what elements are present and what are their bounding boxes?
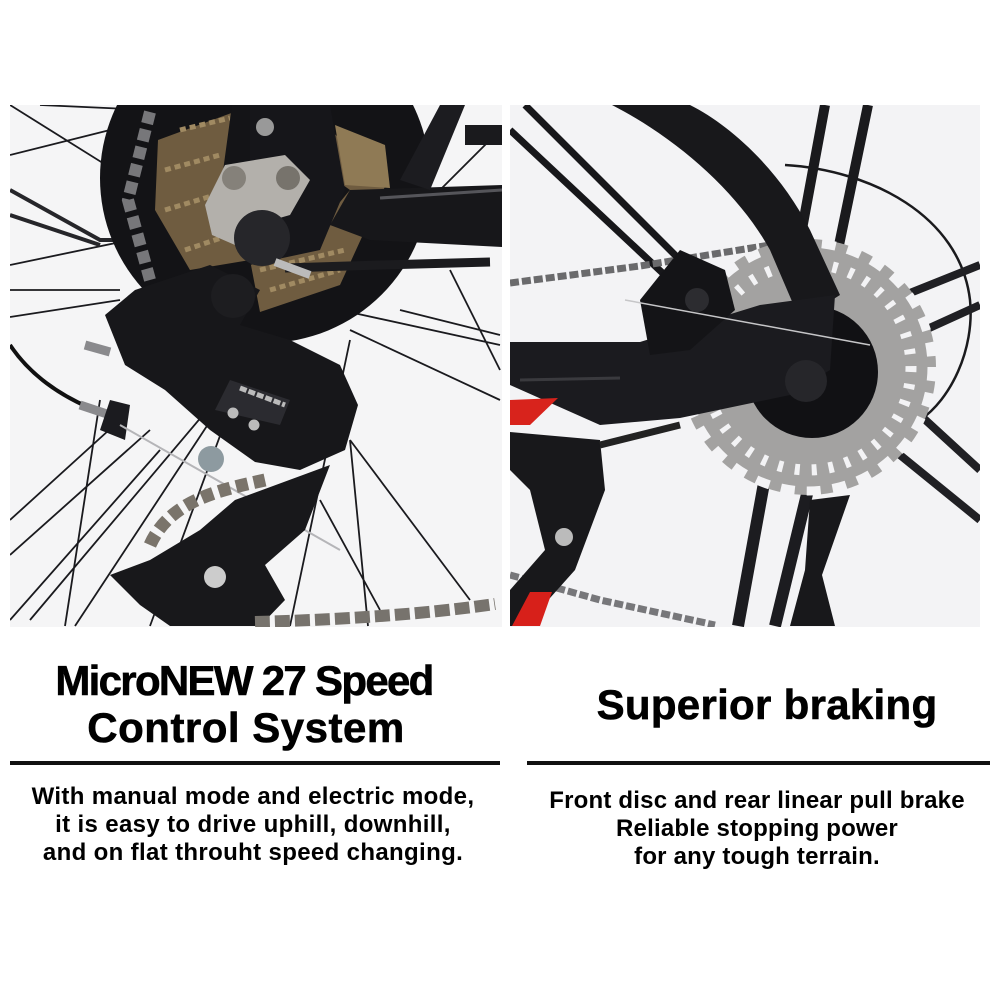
heading: speed control system xyxy=(55,657,433,751)
divider left xyxy=(10,761,500,765)
text: braking description: Reliable stopping power xyxy=(616,815,898,842)
frame xyxy=(330,185,502,247)
derailleur body xyxy=(105,265,358,470)
divider right xyxy=(527,761,990,765)
heading: speed control system: MicroNEW 27 Speed xyxy=(55,657,433,704)
axle knob xyxy=(234,210,290,266)
chain stay xyxy=(510,295,835,425)
text: braking description: Front disc and rear linear pull brake xyxy=(549,787,965,814)
photo: disc brake and rear hub xyxy=(510,105,980,627)
disc rotor xyxy=(680,239,936,495)
dropout plate xyxy=(205,155,310,245)
sprocket xyxy=(790,495,850,626)
heading: superior braking: Superior braking xyxy=(597,681,937,728)
rack tubes xyxy=(510,105,705,285)
heading: speed control system: Control System xyxy=(87,704,405,751)
seat stay xyxy=(612,105,840,320)
text: braking description: for any tough terrain. xyxy=(634,843,880,870)
text: braking description xyxy=(549,787,965,870)
kickstand xyxy=(510,432,605,626)
text: speed control description xyxy=(32,783,474,866)
photo: rear derailleur and cassette xyxy=(10,105,502,627)
barrel and bolts xyxy=(80,345,125,420)
chain xyxy=(510,245,770,283)
text: speed control description: it is easy to drive uphill, downhill, xyxy=(55,811,451,838)
chain xyxy=(255,604,495,622)
caliper xyxy=(640,250,735,355)
text: speed control description: With manual mode and electric mode, xyxy=(32,783,474,810)
cage xyxy=(110,465,330,626)
text: speed control description: and on flat throuht speed changing. xyxy=(43,839,463,866)
cassette xyxy=(100,13,430,343)
cable xyxy=(285,262,490,268)
